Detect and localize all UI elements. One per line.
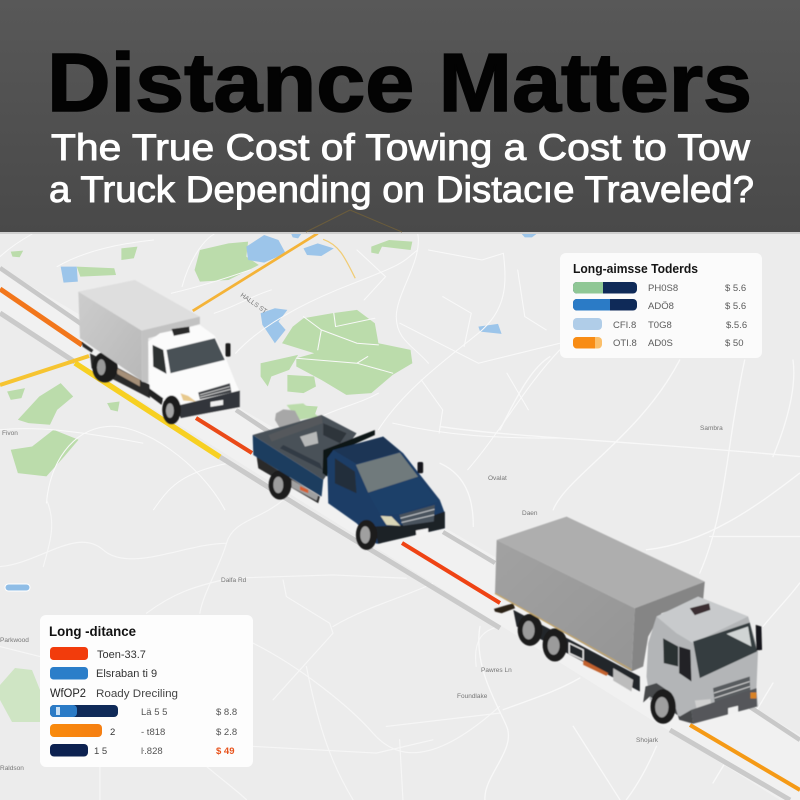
legend red: Toen-33.7 — [97, 649, 146, 661]
panel: long-distance bottom left — [40, 615, 253, 767]
subtitle — [49, 127, 754, 210]
row labels: PH0S8 — [648, 283, 678, 294]
rail — [268, 415, 323, 442]
map labels: Shojark — [636, 737, 659, 744]
map labels: Ovalat — [488, 475, 507, 482]
bed side — [253, 435, 323, 497]
bumper — [375, 512, 445, 544]
mirror — [756, 625, 762, 651]
map: upper left parks, water and streets — [0, 233, 560, 510]
legend blue: Elsraban ti 9 — [96, 668, 157, 680]
hood — [368, 477, 438, 515]
map: small water label marker — [5, 584, 30, 591]
orange diagonal feeder road — [193, 233, 318, 311]
row bar navy blue — [50, 705, 118, 717]
row labels: T0G8 — [648, 320, 672, 331]
headlight — [381, 516, 401, 526]
subheading row: Roady Dreciling — [96, 688, 178, 700]
gray lane upper — [0, 268, 800, 740]
orange and red route — [0, 289, 82, 345]
legend blue — [50, 667, 157, 680]
map: lower left streets — [0, 500, 500, 800]
windshield — [167, 338, 225, 373]
map labels: Fivon — [2, 430, 18, 437]
map labels: Parkwood — [0, 637, 29, 644]
row labels: $.5.6 — [726, 320, 747, 331]
windshield — [356, 453, 418, 493]
title: Distance Matters — [47, 36, 752, 129]
row values: 1 5 — [94, 746, 107, 757]
panel: long-distance top right — [560, 253, 762, 358]
row values: 2 — [110, 727, 115, 738]
cab bar — [323, 430, 375, 477]
bed top with cargo — [253, 415, 357, 480]
subheading row — [50, 688, 178, 700]
mirror — [226, 343, 230, 357]
chassis — [257, 457, 320, 503]
row labels: ADÖ8 — [648, 301, 674, 312]
roof — [333, 437, 401, 464]
front wheel — [650, 689, 676, 724]
map labels: Raldson — [0, 765, 24, 772]
row labels: AD0S — [648, 338, 673, 349]
box front — [632, 582, 705, 672]
cab step — [148, 388, 163, 405]
header band — [0, 0, 800, 234]
chassis trim — [495, 593, 632, 670]
row values: $ 49 — [216, 746, 234, 757]
front wheel — [162, 396, 181, 424]
road: central corridor — [0, 268, 800, 800]
subtitle: The True Cost of Towing a Cost to Tow — [51, 127, 750, 168]
vent — [690, 603, 710, 615]
road surface — [0, 268, 800, 800]
mirror — [417, 462, 423, 473]
cab body — [327, 437, 445, 544]
truck 3: grey cargo truck — [494, 517, 762, 724]
map: lower left park — [0, 668, 40, 722]
box top — [497, 517, 705, 608]
map: right side streets — [440, 357, 800, 800]
grille — [713, 676, 750, 703]
row labels: OTI.8 — [613, 338, 637, 349]
headlight — [695, 699, 711, 708]
row bar orange — [50, 724, 102, 737]
headlight — [181, 393, 196, 402]
map labels: Daen — [522, 510, 538, 517]
map background — [0, 232, 800, 800]
map labels: Sambra — [700, 425, 723, 432]
map labels: HALLS ST — [239, 292, 268, 315]
cab body — [646, 597, 758, 723]
cab roof — [656, 597, 748, 643]
row 4 bar — [573, 337, 602, 348]
panel heading: Long-aimsse Toderds — [573, 262, 698, 276]
truck 2: blue flatbed pickup — [253, 403, 445, 550]
side window — [335, 458, 357, 493]
front wheel — [356, 520, 377, 550]
gray lane lower — [0, 313, 790, 800]
row bar navy — [50, 744, 88, 756]
map labels: Dalfa Rd — [221, 577, 247, 584]
map labels: Foundlake — [457, 693, 488, 700]
grille — [399, 505, 435, 526]
chassis — [90, 353, 150, 398]
cargo bundle — [275, 409, 302, 428]
box side — [495, 540, 635, 672]
windshield — [693, 623, 757, 678]
subtitle: a Truck Depending on Distacıe Traveled? — [49, 169, 754, 210]
cab body — [148, 325, 240, 418]
side window — [153, 345, 167, 374]
box front — [142, 317, 200, 383]
truck 1: white box truck — [78, 280, 240, 424]
plate — [211, 400, 223, 407]
row labels: $ 50 — [725, 338, 744, 349]
row labels: $ 5.6 — [725, 283, 746, 294]
toolbox — [613, 668, 633, 691]
grille — [198, 383, 231, 399]
plate — [728, 706, 738, 715]
row labels — [613, 283, 747, 349]
box top — [78, 280, 200, 331]
legend red — [50, 647, 146, 661]
roof vent — [172, 327, 190, 336]
row values: ŀ.828 — [141, 746, 163, 757]
row 1 bar — [573, 282, 637, 294]
yellow route — [75, 363, 220, 457]
row 3 bar — [573, 318, 602, 330]
box side — [78, 292, 142, 381]
row values: $ 8.8 — [216, 707, 237, 718]
plate — [416, 528, 428, 538]
chassis — [513, 610, 640, 691]
row labels: CFI.8 — [613, 320, 636, 331]
rear wheel — [92, 352, 118, 383]
park patch behind truck — [287, 403, 318, 420]
panel heading: Long -ditance — [49, 623, 136, 639]
wheel arch — [643, 683, 693, 724]
map labels: Pawres Ln — [481, 667, 512, 674]
rear hitch — [494, 603, 515, 613]
bumper — [691, 688, 757, 724]
bumper — [177, 391, 240, 418]
rear wheels — [518, 614, 567, 662]
rear hitch — [82, 342, 93, 353]
side windows — [663, 638, 678, 667]
row values: $ 2.8 — [216, 727, 237, 738]
row 2 bar — [573, 299, 637, 310]
row labels: $ 5.6 — [725, 301, 746, 312]
row values: - t818 — [141, 727, 165, 738]
side frame — [569, 643, 583, 660]
row values: Lä 5 5 — [141, 707, 167, 718]
row values — [94, 707, 237, 757]
rear wheel — [269, 470, 291, 500]
map labels — [0, 292, 723, 772]
subheading row: WfOP2 — [50, 688, 86, 700]
